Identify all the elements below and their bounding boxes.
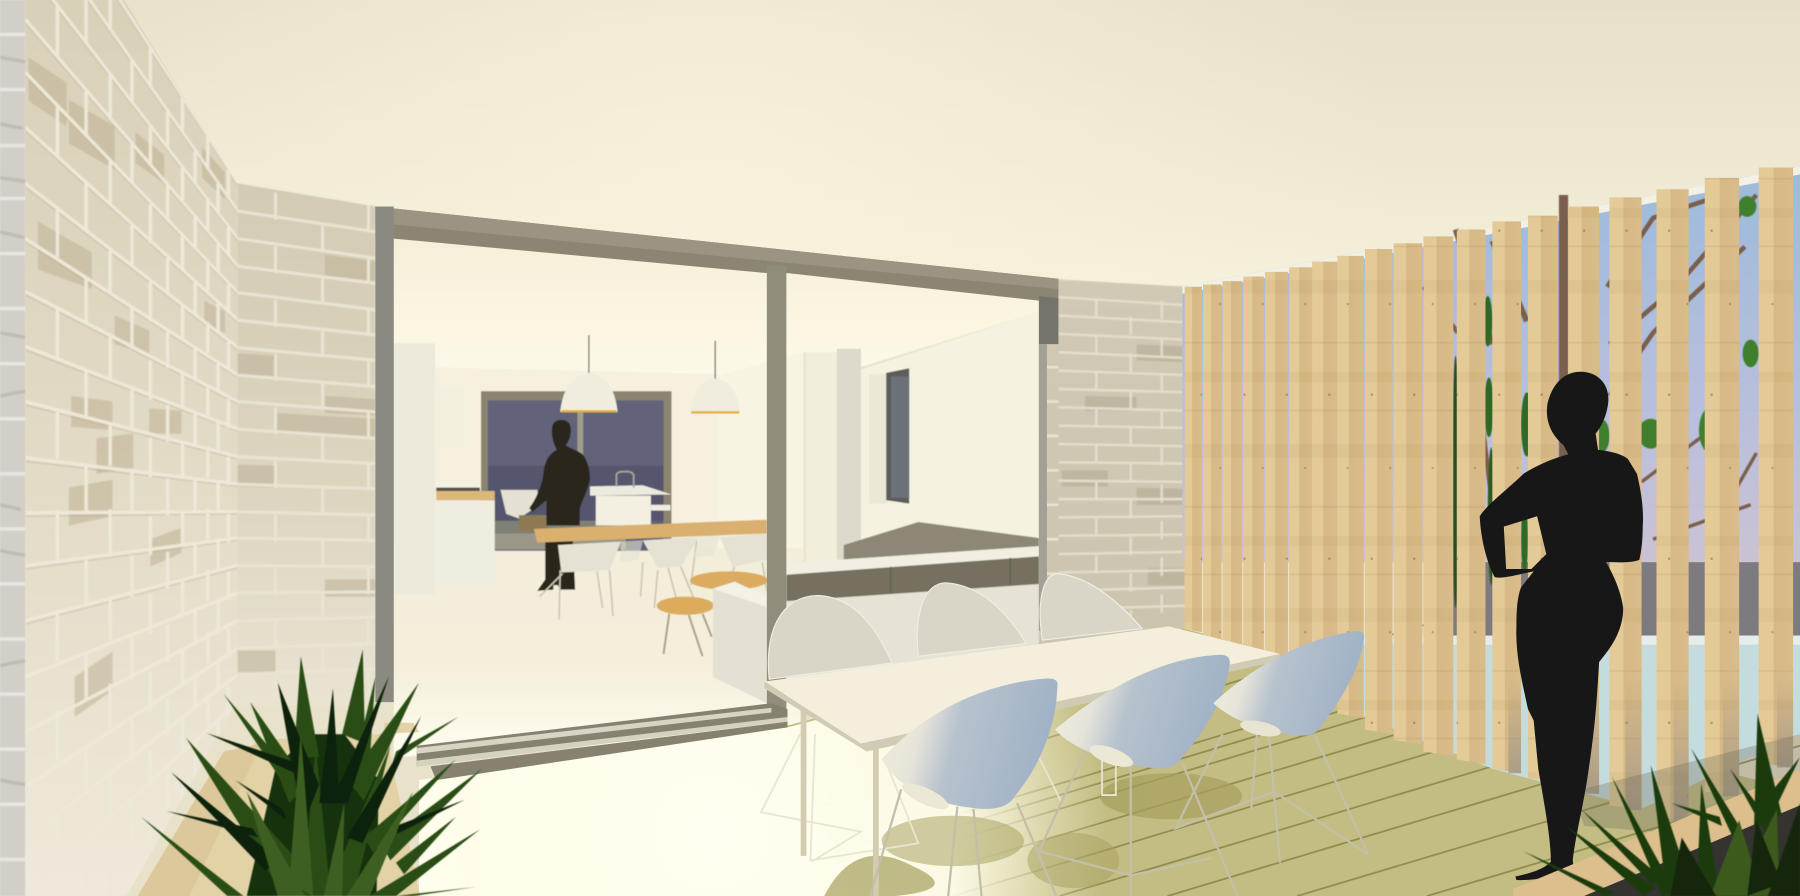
door sill bbox=[417, 703, 788, 780]
panel: back brick wall left of door bbox=[238, 184, 375, 706]
interior person silhouette bbox=[529, 420, 590, 591]
terrace table top bbox=[765, 626, 1280, 751]
panel: interior room seen through door bbox=[394, 235, 1039, 757]
dining table wood top bbox=[534, 520, 767, 543]
door frame bbox=[375, 207, 1058, 719]
table legs bbox=[804, 709, 876, 896]
tree branches and leaves bbox=[1423, 195, 1759, 608]
accent bricks bbox=[29, 57, 225, 717]
ceiling bbox=[115, 0, 1800, 287]
left planter bbox=[138, 723, 420, 896]
interior side wall bbox=[717, 352, 804, 562]
right room wall bbox=[861, 312, 1039, 551]
interior ceiling bbox=[394, 235, 1039, 376]
island with faucet bbox=[590, 472, 672, 525]
panel: left brick wall bbox=[21, 0, 241, 896]
panel: back brick wall right of door bbox=[1038, 279, 1186, 656]
background chairs bbox=[501, 490, 546, 531]
side window bbox=[869, 368, 909, 504]
tall cabinet bbox=[394, 343, 435, 594]
terrace deck bbox=[735, 570, 1800, 896]
dining chairs bbox=[558, 533, 767, 572]
panel: far-left brick edge bbox=[0, 0, 25, 896]
front chair center bbox=[1055, 655, 1230, 771]
chair legs bbox=[870, 729, 1368, 896]
white sofa end bbox=[713, 582, 767, 703]
front chair right bbox=[1213, 631, 1364, 740]
slat lower shading bbox=[1508, 677, 1793, 821]
pillar bbox=[806, 349, 861, 562]
left plant bbox=[141, 649, 482, 896]
front chair left bbox=[882, 678, 1058, 814]
interior back wall bbox=[435, 367, 717, 551]
kitchen counter bbox=[436, 488, 495, 586]
wall cupboard bbox=[435, 387, 465, 449]
back chair legs bbox=[761, 734, 1116, 862]
interior floor bbox=[394, 548, 804, 757]
woman silhouette bbox=[1480, 372, 1643, 880]
dining chair legs bbox=[540, 539, 767, 620]
pendant lamp right bbox=[690, 341, 740, 414]
glass balustrade shadow bbox=[1573, 734, 1800, 832]
sofa seat and front bbox=[786, 546, 1039, 696]
terrace lit floor bbox=[419, 631, 1378, 896]
pendant lamp left bbox=[560, 335, 618, 412]
chair shadows bbox=[824, 773, 1242, 896]
wooden stools bbox=[657, 571, 768, 656]
back window bbox=[481, 391, 672, 551]
right planter bbox=[1513, 770, 1800, 896]
sofa back bbox=[844, 522, 1039, 561]
right plant bbox=[1523, 714, 1800, 896]
wooden slat screen bbox=[1185, 167, 1793, 821]
back row chairs bbox=[768, 574, 1142, 679]
sky and surroundings behind slats bbox=[1182, 166, 1800, 809]
